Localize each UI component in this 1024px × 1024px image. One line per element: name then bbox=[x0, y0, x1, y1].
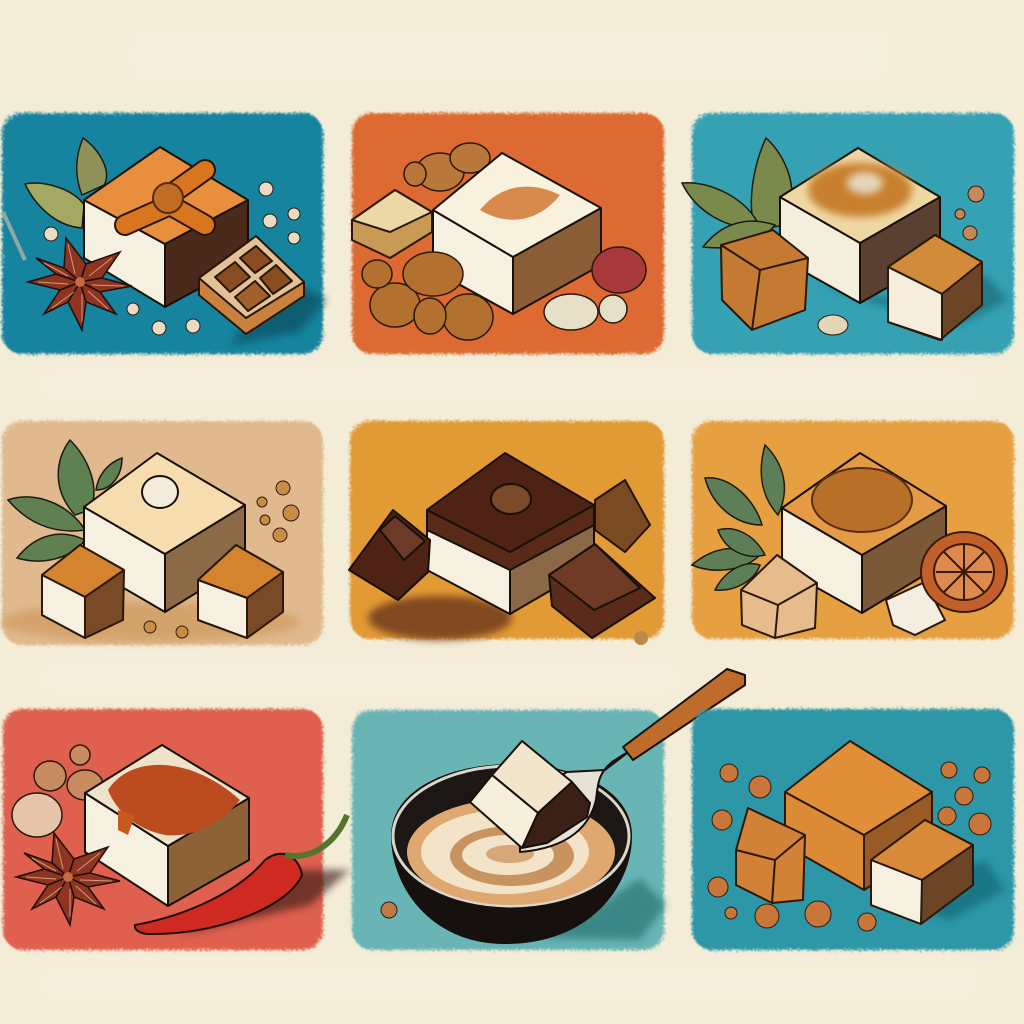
icon: star anise bbox=[16, 833, 120, 925]
icon: chocolate left bbox=[349, 510, 430, 600]
icon: orange slice bbox=[921, 532, 1007, 612]
panel 7: red, chili tofu bbox=[3, 709, 350, 950]
icon: pale cube bbox=[741, 555, 817, 638]
bean bbox=[381, 902, 397, 918]
icon: chocolate shard bbox=[595, 480, 650, 552]
icon: tofu cube with caramel bbox=[84, 147, 248, 307]
icon: tofu cube with chocolate bbox=[427, 453, 594, 614]
beans bbox=[818, 186, 984, 335]
icon: waffle cube bbox=[199, 236, 304, 334]
icon: bowl of sauce bbox=[392, 765, 631, 943]
icon: leaves bbox=[25, 138, 107, 228]
icon: walnuts front bbox=[362, 252, 493, 340]
icon: tofu cube bbox=[433, 153, 601, 314]
icon: tofu cube with nuts bbox=[782, 453, 946, 613]
panel 2: orange, walnut tofu bbox=[352, 113, 664, 354]
icon: right cube with white side bbox=[871, 820, 973, 924]
beans bbox=[144, 481, 299, 638]
icon: tofu cube bbox=[84, 453, 245, 612]
panel 3: teal, spiced tofu bbox=[682, 113, 1014, 354]
icon: chili pepper bbox=[135, 815, 347, 934]
icon: spoon bbox=[520, 669, 745, 852]
panel 5: orange, chocolate tofu bbox=[349, 421, 664, 645]
icon: tofu cube bbox=[780, 148, 940, 303]
beans bbox=[44, 182, 300, 335]
beans bbox=[708, 762, 991, 931]
panel 8: light teal, tofu dipped in sauce bbox=[352, 669, 745, 950]
icon: leaves bbox=[682, 138, 792, 248]
icon: chocolate right bbox=[549, 544, 655, 638]
icon: small cube back left bbox=[352, 190, 432, 258]
icon: spiced cube right bbox=[888, 235, 982, 340]
icon: nuts top bbox=[404, 143, 490, 191]
icon: leaves bbox=[8, 440, 122, 561]
icon: tofu cube with chili flakes bbox=[85, 745, 249, 906]
icon: pale piece bbox=[886, 582, 945, 635]
panel 1: teal, caramel tofu bbox=[2, 113, 326, 354]
icon: large spiced cube bbox=[785, 741, 932, 890]
panel 6: orange, nut-topped tofu bbox=[692, 421, 1014, 639]
icon: left spiced cube bbox=[736, 808, 805, 903]
icon: tofu cube on spoon bbox=[470, 741, 590, 848]
icon: leaves bbox=[692, 445, 784, 590]
icon: spiced cube left bbox=[42, 545, 124, 638]
icon: cocoa powder bbox=[368, 596, 512, 640]
icon: spiced cube left bbox=[721, 230, 808, 330]
panel 4: tan, creamy tofu bbox=[0, 421, 323, 645]
icon: star anise bbox=[28, 238, 132, 330]
icon: red nut and pebbles bbox=[544, 247, 646, 330]
icon: spiced cube right bbox=[198, 545, 283, 638]
icon: nuts bbox=[12, 745, 103, 837]
panel 9: teal, spiced tofu cubes bbox=[692, 709, 1014, 950]
